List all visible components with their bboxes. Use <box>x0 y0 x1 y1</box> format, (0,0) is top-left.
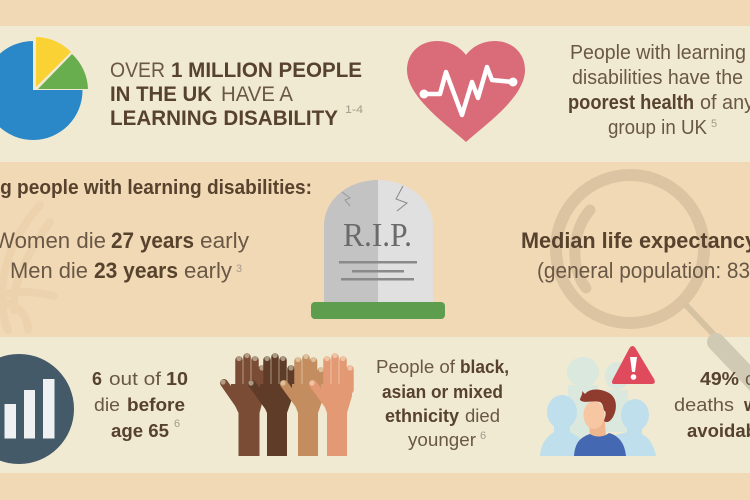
hand: tan <box>280 354 324 456</box>
text: 49% avoidable: deaths <box>674 394 734 415</box>
text: 6 out of 10: before <box>127 394 185 415</box>
heading: over 1 million people: IN THE UK <box>110 83 212 106</box>
text: poorest health: poorest health <box>568 92 694 114</box>
heading: over 1 million people: OVER <box>110 59 165 82</box>
text: poorest health: disabilities have the <box>572 67 743 89</box>
text: 49% avoidable: 49% <box>700 368 739 389</box>
icon: decorative plant <box>0 205 54 330</box>
text: 6 out of 10: 6 <box>92 368 102 389</box>
text: 6 out of 10: die <box>94 394 120 415</box>
icon: bar chart circle <box>0 354 74 464</box>
heading: over 1 million people <box>110 59 363 130</box>
icon: pie chart <box>0 37 88 140</box>
heading: over 1 million people: LEARNING DISABILITY <box>110 107 338 130</box>
text: poorest health: 5 <box>711 118 717 130</box>
text: 6 out of 10: 6 <box>174 418 180 430</box>
text: 6 out of 10: out of <box>109 368 162 389</box>
text: poorest health: People with learning <box>570 42 746 64</box>
text: ethnicity: People of <box>376 357 456 377</box>
text: median life expectancy <box>521 228 750 283</box>
text: years early: early <box>184 258 232 283</box>
text: ethnicity: died <box>465 406 500 426</box>
text: poorest health: group in UK <box>608 117 708 139</box>
text: poorest health <box>568 42 750 139</box>
heading: over 1 million people: 1 MILLION PEOPLE <box>171 59 362 82</box>
hand: darkest brown <box>248 353 294 456</box>
text: years early: 3 <box>236 263 242 275</box>
text: ethnicity: 6 <box>480 430 486 442</box>
text: years early: 27 years <box>111 228 194 253</box>
text: ethnicity: asian or mixed <box>382 382 503 402</box>
icon: raised hands <box>220 353 353 456</box>
text: ethnicity: ethnicity <box>385 406 459 426</box>
text: 49% avoidable <box>674 368 750 441</box>
text: 6 out of 10 <box>92 368 188 441</box>
hand: dark brown <box>220 353 265 456</box>
icon: worried person with warning sign <box>540 346 656 456</box>
text: years early: 23 years <box>94 258 178 283</box>
text: ethnicity <box>376 357 509 450</box>
text: years early <box>0 228 249 283</box>
text: years early: Men die <box>10 258 88 283</box>
text: 6 out of 10: 10 <box>166 368 188 389</box>
text: 6 out of 10: age 65 <box>111 420 169 441</box>
icon: gravestone <box>311 180 445 319</box>
text: years early: early <box>200 228 249 253</box>
icon: magnifying glass <box>556 175 750 384</box>
bottom panel band <box>0 337 750 473</box>
heading: over 1 million people: HAVE A <box>221 83 293 106</box>
hand: light peach <box>309 353 353 456</box>
text: ethnicity: black, <box>460 357 509 377</box>
icon: gravestone: R.I.P. <box>343 217 412 254</box>
text: ethnicity: younger <box>408 430 476 450</box>
heading: over 1 million people: 1-4 <box>345 104 363 116</box>
icon: heart with pulse line <box>407 41 525 142</box>
top panel band <box>0 26 750 162</box>
